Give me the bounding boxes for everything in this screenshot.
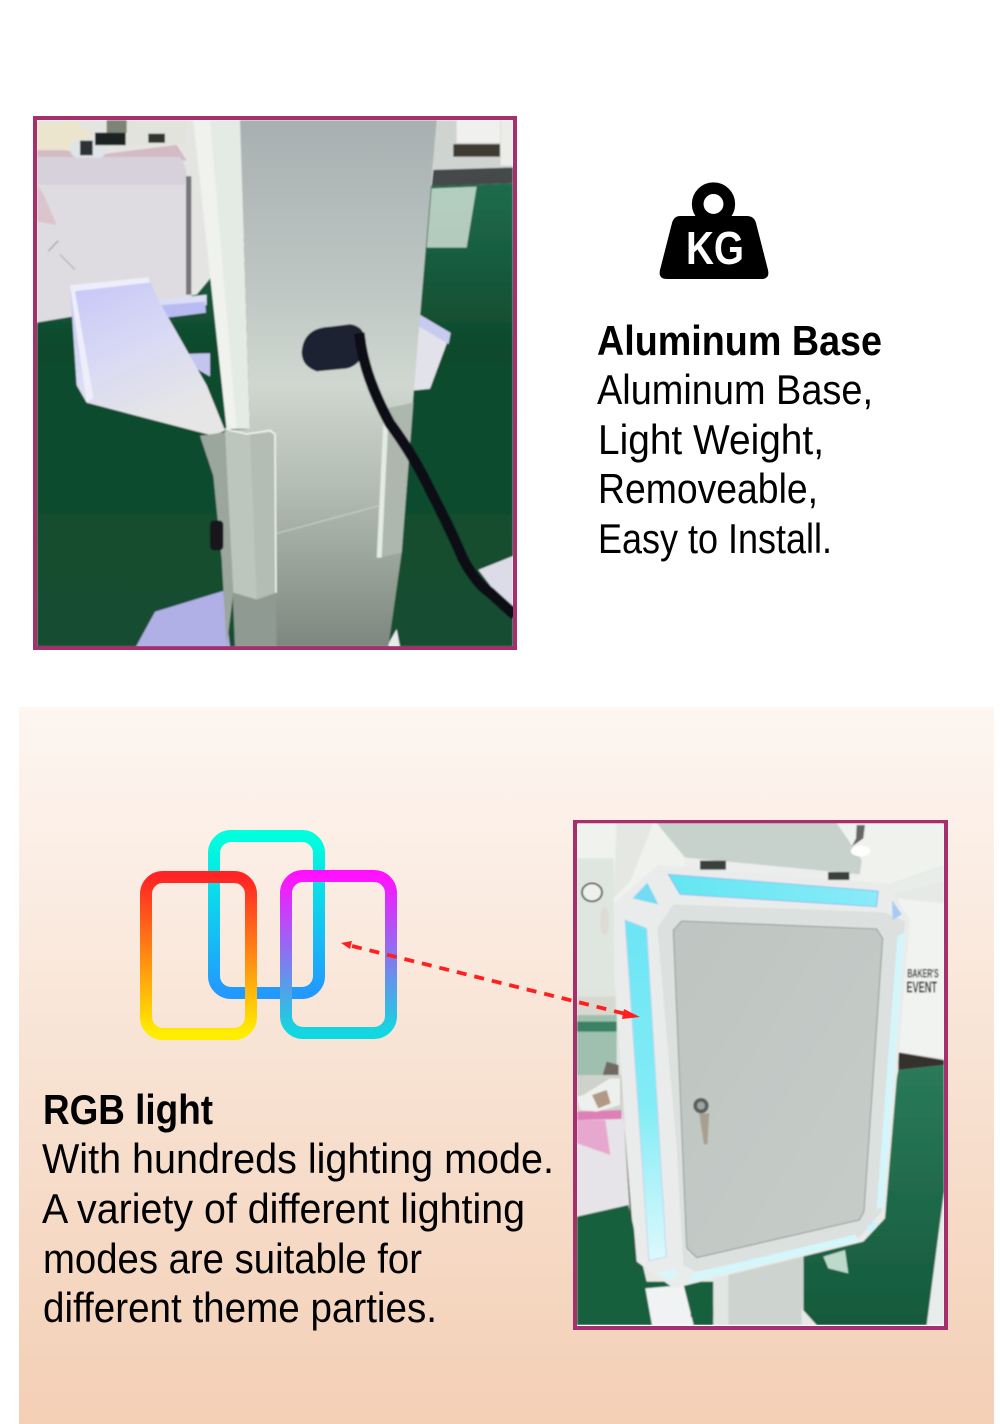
text block: rgb light: With hundreds lighting mode. [42,1135,554,1182]
text block: aluminum base: Aluminum Base, [597,366,873,413]
photo: stand with glowing rgb light bars: BAKER'S [907,966,939,980]
photo: aluminum base of the stand [35,118,515,648]
text block: aluminum base [597,317,882,562]
icon: overlapping rgb light frames [146,836,391,1034]
photo: stand with glowing rgb light bars [575,822,946,1328]
photo: stand with glowing rgb light bars: EVENT [906,979,937,996]
text block: aluminum base: Light Weight, [598,416,824,463]
text block: aluminum base: Removeable, [598,465,818,512]
text block: rgb light: A variety of different lighting [42,1185,525,1232]
icon: kilogram weight: KG [686,222,744,274]
text block: aluminum base: Easy to Install. [598,515,832,562]
text block: aluminum base: Aluminum Base [597,317,882,364]
text block: rgb light: RGB light [43,1086,213,1133]
icon: kilogram weight [660,188,768,279]
text block: rgb light [42,1086,554,1331]
text block: rgb light: modes are suitable for [43,1235,422,1282]
panel: rgb light background [19,707,994,1424]
text block: rgb light: different theme parties. [43,1284,437,1331]
arrow: red dashed pointer from icon to light bar [341,941,640,1019]
